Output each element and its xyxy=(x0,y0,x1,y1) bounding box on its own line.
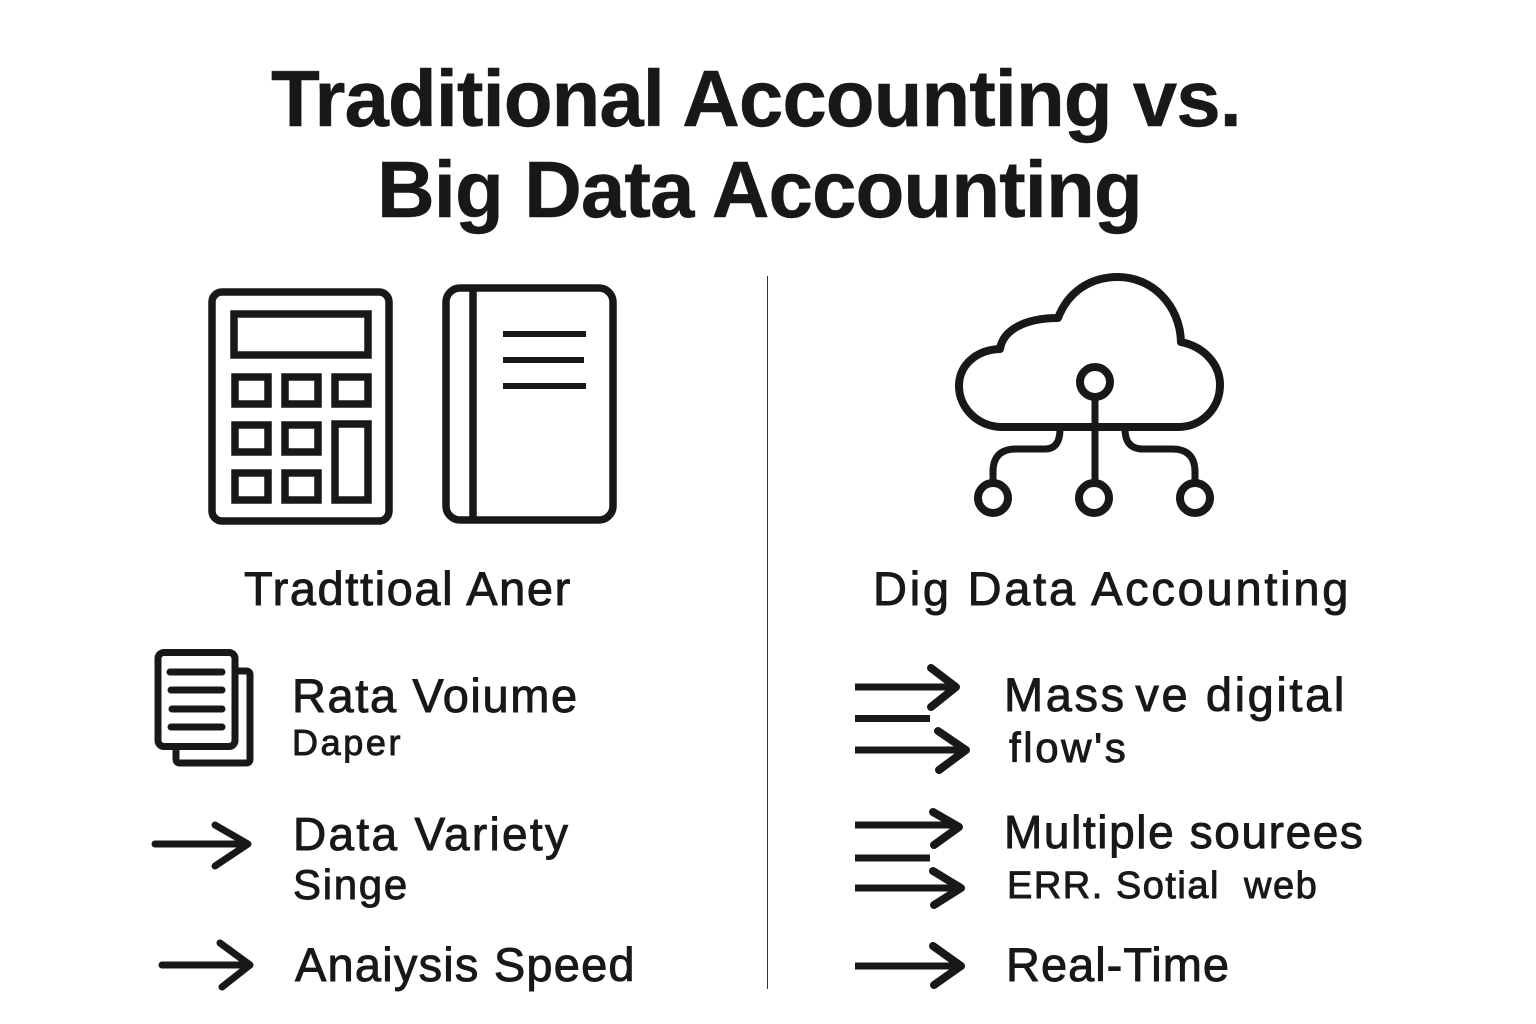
left row 3 text: Anaiysis Speed xyxy=(295,938,636,991)
left row 1 text: Daper xyxy=(292,722,403,763)
arrows: massive digital flows xyxy=(855,664,970,774)
left row 2 text: Data Variety xyxy=(293,808,570,860)
right row 1 text xyxy=(1004,668,1347,771)
right heading: Dig Data Accounting xyxy=(873,562,1351,615)
left row 2 text xyxy=(293,808,570,908)
right row 3 text: Real-Time xyxy=(1006,938,1230,991)
arrow: analysis speed xyxy=(158,940,254,990)
icon: cloud network xyxy=(955,273,1224,517)
right row 2 text: Multiple sourees xyxy=(1004,806,1365,858)
left row 1 text xyxy=(292,669,579,763)
arrows: multiple sources xyxy=(855,808,965,909)
arrow: data variety xyxy=(152,822,252,870)
left row 2 text: Singe xyxy=(293,861,409,908)
title: Big Data Accounting xyxy=(377,145,1142,234)
right row 1 text: flow's xyxy=(1009,724,1128,771)
left row 1 text: Rata Voiume xyxy=(292,669,579,722)
title xyxy=(271,54,1241,234)
title: Traditional Accounting vs. xyxy=(271,54,1241,143)
center divider xyxy=(766,276,768,989)
icon: paper stack xyxy=(154,649,254,766)
right row 1 text: Mass ve digital xyxy=(1004,668,1347,721)
icon: calculator xyxy=(208,288,393,525)
arrow: real-time xyxy=(855,942,965,989)
left heading: Tradttioal Aner xyxy=(244,562,572,615)
right row 2 text xyxy=(1004,806,1365,907)
right row 2 text: ERR. Sotial web xyxy=(1007,865,1318,907)
icon: ledger book xyxy=(442,284,617,524)
